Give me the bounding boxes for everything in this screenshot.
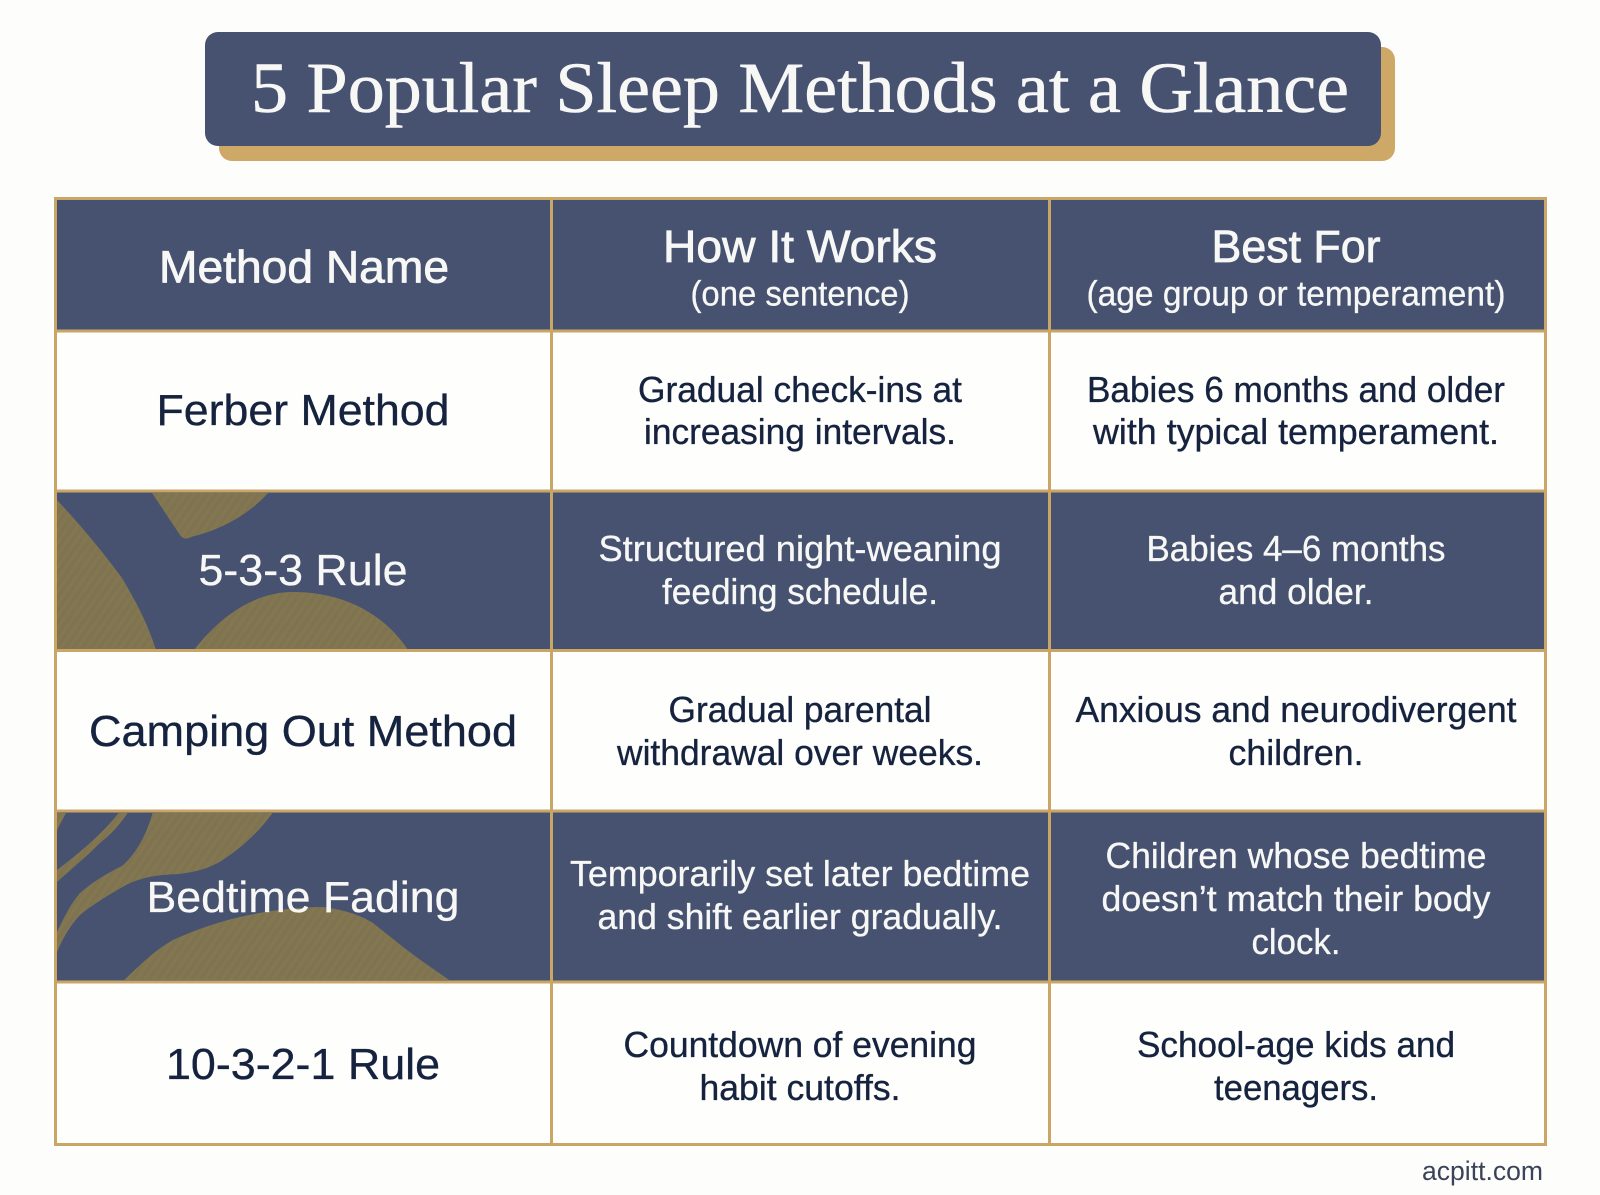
row: 10-3-2-1 Rule: 10-3-2-1 Rule xyxy=(166,1040,440,1089)
row: Camping Out Method xyxy=(89,689,1516,773)
leaf decoration: row 5-3-3 xyxy=(57,490,408,650)
table xyxy=(55,198,1546,1145)
header: How It Works: (one sentence) xyxy=(690,274,910,314)
header: Best For xyxy=(1086,221,1506,314)
row: Ferber Method: increasing intervals. xyxy=(644,411,956,452)
row: Ferber Method: Babies 6 months and older xyxy=(1087,369,1505,410)
row: Bedtime Fading: doesn’t match their body xyxy=(1102,878,1490,919)
row: 5-3-3 Rule: Structured night-weaning xyxy=(598,528,1002,569)
row: Camping Out Method: Anxious and neurodivergent xyxy=(1076,689,1516,730)
row: Ferber Method xyxy=(156,369,1505,452)
table grid lines xyxy=(55,198,1546,1145)
row: 5-3-3 Rule: Babies 4–6 months xyxy=(1146,528,1446,569)
row: Camping Out Method: withdrawal over weeks. xyxy=(616,732,983,773)
row: Bedtime Fading: Bedtime Fading xyxy=(146,873,460,922)
title banner xyxy=(205,32,1395,161)
row: Bedtime Fading: Children whose bedtime xyxy=(1106,835,1486,876)
row: Camping Out Method: Gradual parental xyxy=(668,689,932,730)
row: 5-3-3 Rule xyxy=(198,528,1446,612)
header: How It Works: How It Works xyxy=(663,221,937,272)
title: 5 Popular Sleep Methods at a Glance xyxy=(251,48,1349,128)
row: 10-3-2-1 Rule xyxy=(166,1024,1455,1108)
banner navy plate xyxy=(205,32,1381,146)
row: 5-3-3 Rule: feeding schedule. xyxy=(662,571,938,612)
row: 5-3-3 Rule: 5-3-3 Rule xyxy=(198,546,408,595)
header: Best For: (age group or temperament) xyxy=(1086,274,1506,314)
header: How It Works xyxy=(663,221,937,314)
row: 5-3-3 Rule: and older. xyxy=(1218,571,1374,612)
table white base xyxy=(55,198,1546,1145)
banner gold shadow xyxy=(219,47,1395,161)
row 4 background xyxy=(55,811,1546,982)
row: Bedtime Fading: clock. xyxy=(1252,921,1340,962)
row: 10-3-2-1 Rule: habit cutoffs. xyxy=(700,1067,900,1108)
row 2 background xyxy=(55,491,1546,650)
row: Bedtime Fading xyxy=(146,835,1490,962)
header: Best For: Best For xyxy=(1212,221,1381,272)
header: Method Name: Method Name xyxy=(159,242,449,292)
row: Ferber Method: with typical temperament. xyxy=(1092,411,1499,452)
row: Bedtime Fading: and shift earlier gradually. xyxy=(598,896,1002,937)
header row background xyxy=(55,198,1546,331)
row: 10-3-2-1 Rule: Countdown of evening xyxy=(624,1024,976,1065)
row: Bedtime Fading: Temporarily set later bedtime xyxy=(570,853,1030,894)
leaf decoration: row bedtime fading xyxy=(57,811,452,982)
footer credit: acpitt.com xyxy=(1422,1156,1543,1186)
row: Camping Out Method: Camping Out Method xyxy=(89,707,517,756)
row: Ferber Method: Ferber Method xyxy=(156,386,450,435)
row: 10-3-2-1 Rule: teenagers. xyxy=(1214,1067,1378,1108)
row: Ferber Method: Gradual check-ins at xyxy=(638,369,962,410)
row: Camping Out Method: children. xyxy=(1228,732,1364,773)
row: 10-3-2-1 Rule: School-age kids and xyxy=(1137,1024,1455,1065)
